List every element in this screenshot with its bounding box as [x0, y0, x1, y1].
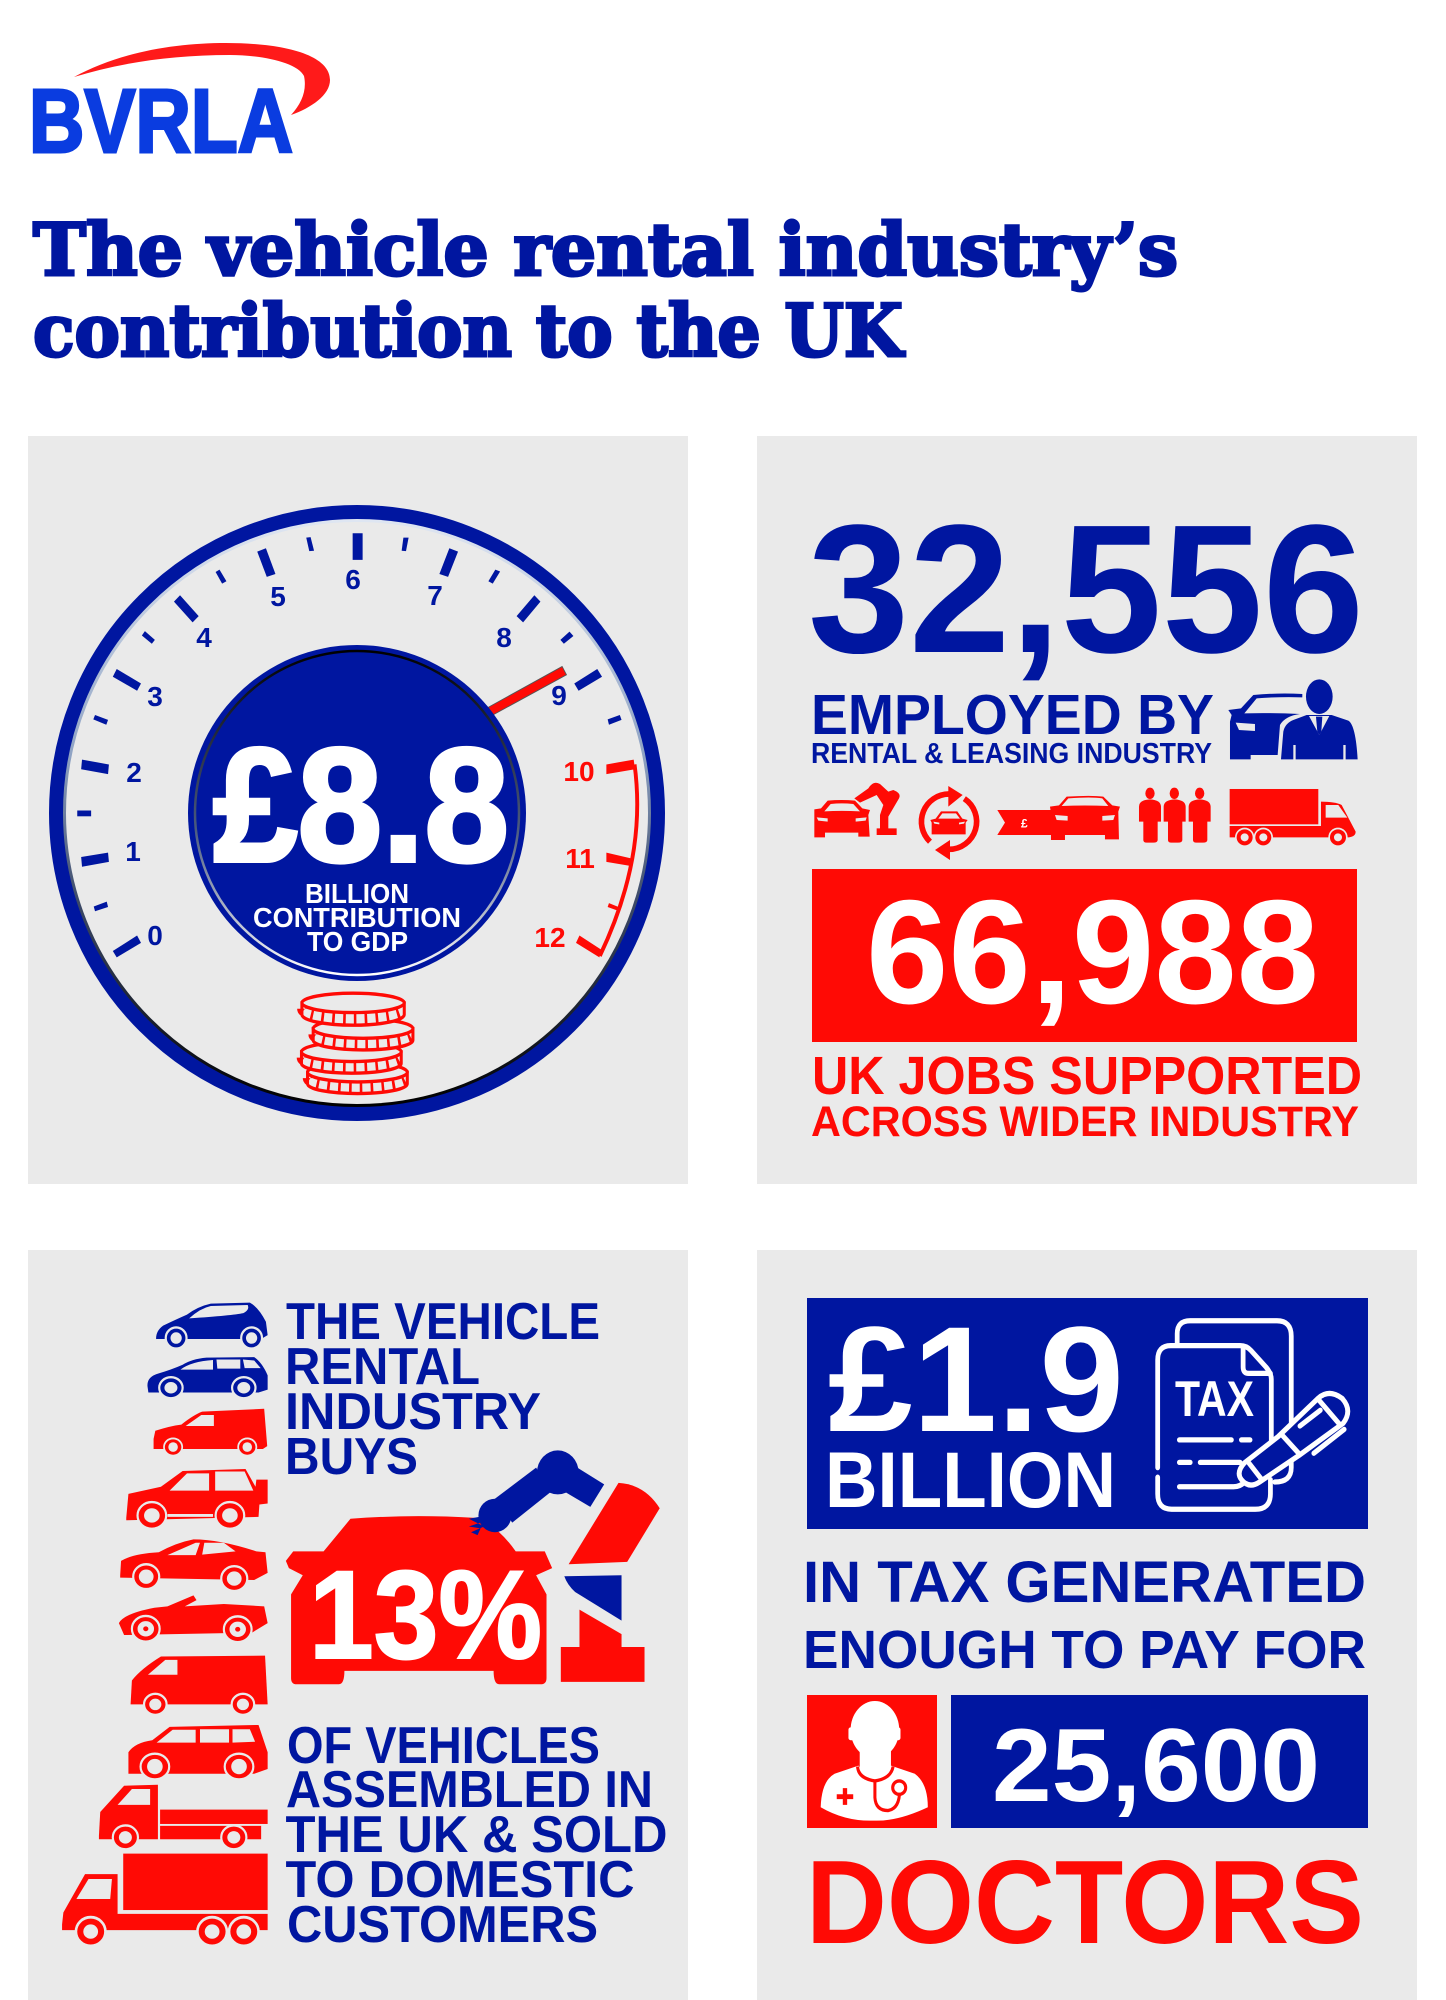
gauge scale numbers: 5 — [270, 581, 286, 612]
panel: tax — [757, 1250, 1417, 2000]
gauge scale numbers: 6 — [345, 564, 361, 595]
icon: people carrier — [128, 1725, 268, 1779]
text: of vehicles assembled in the UK: THE UK & SOLD — [286, 1806, 668, 1864]
text: employed by: RENTAL & LEASING INDUSTRY — [811, 738, 1212, 770]
stat box: 25,600: 25,600 — [992, 1708, 1320, 1824]
icon: car in cycle arrows — [921, 786, 977, 860]
text: employed by: EMPLOYED BY — [811, 683, 1214, 747]
icons: column of vehicles — [62, 1303, 268, 1946]
stat box: £1.9 billion — [807, 1295, 1368, 1529]
gauge scale numbers: 4 — [196, 622, 212, 653]
text: in tax generated: ENOUGH TO PAY FOR — [803, 1620, 1366, 1680]
panel: vehicles bought — [28, 1250, 688, 2000]
gauge centre: £8.8 billion — [188, 645, 526, 981]
text: in tax generated — [803, 1550, 1366, 1680]
stat: 32,556: 32,556 — [808, 486, 1364, 691]
text: of vehicles assembled in the UK: ASSEMBLED IN — [286, 1761, 653, 1819]
title: The vehicle rental industry’s — [33, 207, 1178, 292]
text: UK jobs supported — [811, 1046, 1362, 1146]
icon: small van — [154, 1409, 267, 1456]
panel: GDP gauge — [28, 436, 688, 1184]
icon: tax document and pen — [1158, 1321, 1348, 1509]
icon: panel van — [131, 1656, 268, 1715]
title — [33, 207, 1178, 373]
gauge needle — [488, 667, 566, 715]
stat box: 66,988: 66,988 — [866, 870, 1319, 1035]
text: UK jobs supported: ACROSS WIDER INDUSTRY — [811, 1098, 1359, 1146]
icons: supply chain row — [814, 783, 1356, 860]
gauge scale numbers: 9 — [551, 680, 567, 711]
text: of vehicles assembled in the UK: TO DOMESTIC — [286, 1851, 634, 1909]
gauge centre: £8.8 billion: TO GDP — [307, 926, 408, 957]
text: the vehicle rental industry buys: INDUSTRY — [285, 1383, 541, 1441]
icon: car and salesperson — [1228, 679, 1358, 759]
text: of vehicles assembled in the UK — [286, 1717, 668, 1954]
gauge centre: £8.8 billion: BILLION — [305, 878, 409, 909]
gauge centre: £8.8 billion: £8.8 — [213, 715, 509, 896]
text: the vehicle rental industry buys — [285, 1293, 600, 1486]
text: the vehicle rental industry buys: RENTAL — [285, 1338, 480, 1396]
gauge scale numbers: 2 — [126, 757, 142, 788]
stat box: £1.9 billion: BILLION — [825, 1435, 1116, 1524]
icon: saloon car — [120, 1539, 268, 1591]
title: contribution to the UK — [33, 288, 905, 373]
text: of vehicles assembled in the UK: CUSTOMERS — [287, 1896, 598, 1954]
icon: car and robot arm with 13%: 13% — [309, 1546, 542, 1685]
gauge scale numbers: 0 — [147, 920, 163, 951]
icon: flatbed truck — [99, 1785, 268, 1849]
gauge scale numbers — [125, 564, 595, 953]
gauge dial — [56, 512, 658, 1114]
icon: tax document and pen: TAX — [1175, 1371, 1254, 1427]
icon: three workers — [1139, 788, 1211, 843]
icon: car with price ribbon — [997, 796, 1120, 840]
gauge scale numbers: 8 — [496, 622, 512, 653]
gauge scale numbers: 10 — [563, 756, 595, 787]
stat box: 25,600 — [951, 1695, 1368, 1828]
icon: car and robot arm with 13% — [286, 1450, 660, 1685]
text: the vehicle rental industry buys: BUYS — [285, 1428, 418, 1486]
icon: blue estate car — [147, 1357, 268, 1398]
icon: coin stack — [301, 993, 413, 1094]
icon: SUV — [126, 1469, 268, 1529]
icon: blue hatchback — [156, 1303, 268, 1349]
gauge centre: £8.8 billion: CONTRIBUTION — [253, 902, 461, 933]
icon: car with price ribbon: £ — [1021, 817, 1028, 831]
icon: convertible — [119, 1595, 268, 1642]
gauge scale numbers: 1 — [125, 836, 141, 867]
gauge scale numbers: 7 — [427, 580, 443, 611]
icon: doctor — [807, 1695, 937, 1828]
gauge scale numbers: 11 — [565, 843, 595, 874]
text: doctors: DOCTORS — [806, 1836, 1364, 1969]
logo: BVRLA: BVRLA — [29, 72, 293, 172]
panel: employment — [757, 436, 1417, 1184]
gauge scale numbers: 12 — [534, 922, 566, 953]
text: the vehicle rental industry buys: THE VEHICLE — [286, 1293, 600, 1351]
icon: box lorry — [62, 1854, 268, 1946]
icon: car on assembly line — [814, 783, 900, 837]
icon: lorry — [1230, 789, 1356, 847]
text: of vehicles assembled in the UK: OF VEHICLES — [287, 1717, 600, 1775]
text: UK jobs supported: UK JOBS SUPPORTED — [812, 1046, 1362, 1106]
stat box: £1.9 billion: £1.9 — [828, 1295, 1124, 1463]
gauge scale numbers: 3 — [147, 681, 163, 712]
text: in tax generated: IN TAX GENERATED — [803, 1550, 1366, 1615]
